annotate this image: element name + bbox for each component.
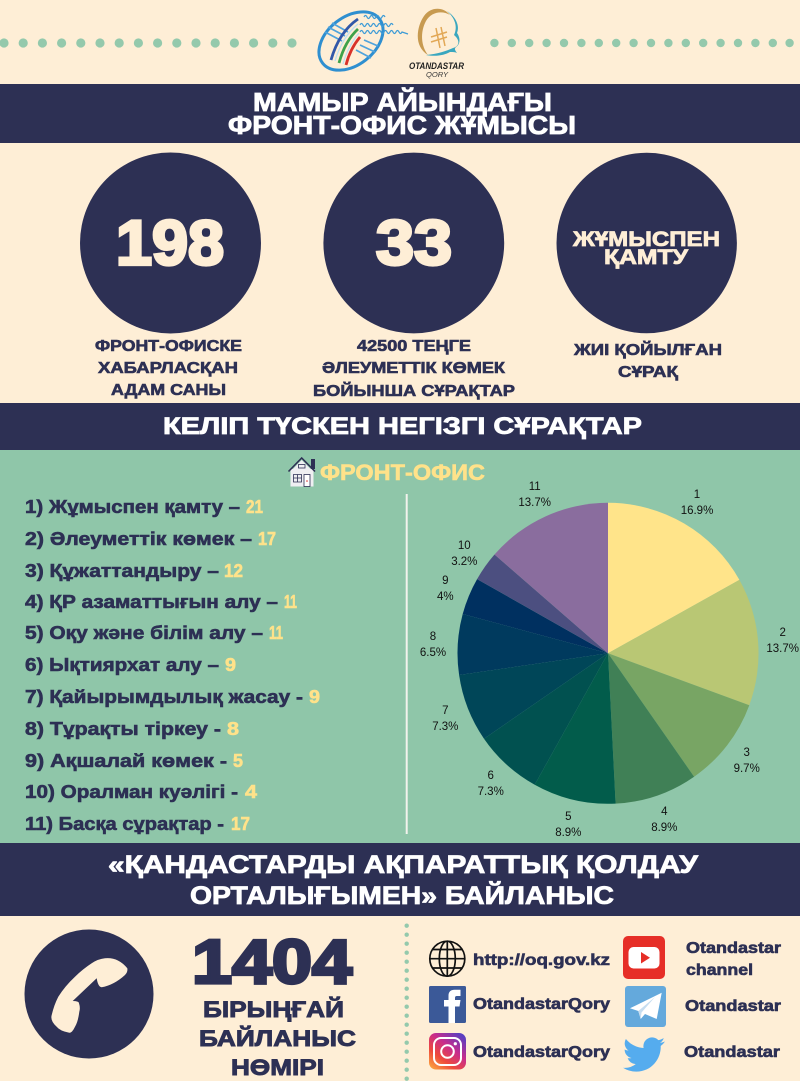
hotline number [192, 928, 356, 1080]
logo wordmark: OTANDASTAR [409, 61, 465, 71]
hotline number: БІРЫҢҒАЙ [203, 997, 344, 1022]
logo: blue ellipse emblem [308, 0, 408, 82]
panel: front office questions [0, 450, 800, 843]
item 9: 9) Ақшалай көмек - [25, 750, 227, 771]
website link: http://oq.gov.kz [473, 952, 610, 969]
pie labels: 7.3% [478, 786, 504, 798]
item 3: 3) Құжаттандыру – [25, 560, 219, 581]
item 10: 10) Оралман куәлігі - [25, 781, 238, 802]
youtube channel name: Otandastar [686, 940, 781, 957]
item 11: 17 [231, 813, 250, 834]
stat: 198: ФРОНТ-ОФИСКЕ [95, 338, 242, 355]
pie labels [420, 481, 799, 839]
item 8: 8) Тұрақты тіркеу - [25, 718, 221, 739]
stat: 198 [80, 152, 261, 399]
item 6: 6) Ықтиярхат алу – [25, 654, 219, 675]
icon: house [288, 458, 315, 486]
item 6: 9 [225, 654, 236, 675]
logo wordmark [409, 61, 465, 79]
stat: 198: АДАМ САНЫ [111, 382, 226, 399]
facebook handle: OtandastarQory [473, 996, 610, 1013]
pie labels: 4% [437, 591, 454, 603]
stat: 33: ӘЛЕУМЕТТІК КӨМЕК [322, 360, 506, 377]
item 3: 12 [224, 560, 243, 581]
title band [0, 84, 800, 143]
pie labels: 9.7% [734, 763, 760, 775]
stat: most asked question: ЖҰМЫСПЕН [572, 228, 720, 251]
dotted row: right [490, 39, 794, 47]
section band: main questions [0, 403, 800, 450]
telegram name: Otandastar [685, 998, 781, 1015]
title band: ФРОНТ-ОФИС ЖҰМЫСЫ [228, 112, 576, 140]
item 7: 9 [309, 686, 320, 707]
stat: 33: 33 [376, 208, 452, 278]
icon: facebook [429, 986, 466, 1023]
dotted row: left [0, 38, 297, 48]
pie labels: 3 [743, 747, 750, 759]
pie labels: 6.5% [420, 647, 446, 659]
hotline number: 1404 [192, 928, 353, 997]
pie labels: 1 [694, 489, 700, 501]
pie labels: 5 [565, 811, 572, 823]
item 7: 7) Қайырымдылық жасау - [25, 686, 303, 707]
pie labels: 7 [442, 705, 449, 717]
icon: globe [430, 941, 465, 976]
instagram handle: OtandastarQory [473, 1044, 610, 1061]
item 2: 2) Әлеуметтік көмек – [25, 528, 252, 549]
pie labels: 4 [661, 806, 668, 818]
logo: Otandastar Qory [409, 9, 465, 79]
stat: 33: БОЙЫНША СҰРАҚТАР [313, 382, 515, 400]
panel heading: ФРОНТ-ОФИС [320, 460, 485, 485]
hotline number: БАЙЛАНЫС [199, 1026, 356, 1051]
item 5: 11 [269, 622, 283, 643]
stat: 198: 198 [116, 208, 224, 278]
pie labels: 13.7% [766, 643, 799, 655]
section band: main questions: КЕЛІП ТҮСКЕН НЕГІЗГІ СҰРАҚТАР [163, 413, 642, 440]
pie labels: 7.3% [432, 721, 458, 733]
pie labels: 9 [442, 575, 449, 587]
logo wordmark: QORY [426, 70, 449, 79]
youtube channel name: channel [686, 962, 753, 979]
pie labels: 8 [430, 631, 436, 643]
stat: 33: 42500 ТЕҢГЕ [357, 338, 471, 355]
item 1: 21 [246, 496, 263, 517]
pie labels: 13.7% [518, 497, 551, 509]
youtube channel name [686, 940, 781, 979]
pie labels: 8.9% [651, 822, 677, 834]
stat: most asked question: СҰРАҚ [618, 364, 679, 381]
item 9: 5 [233, 750, 243, 771]
icon: telegram [625, 986, 666, 1027]
stat: 198: ХАБАРЛАСҚАН [98, 360, 238, 377]
twitter name: Otandastar [684, 1044, 780, 1061]
stat: most asked question: ЖИІ ҚОЙЫЛҒАН [573, 341, 722, 359]
pie labels: 6 [487, 770, 494, 782]
section band: contact centre [0, 843, 800, 916]
pie chart [420, 481, 799, 839]
section band: contact centre: «ҚАНДАСТАРДЫ АҚПАРАТТЫҚ ҚОЛДАУ [108, 851, 699, 879]
item 5: 5) Оқу және білім алу – [25, 622, 263, 643]
pie labels: 16.9% [681, 505, 713, 517]
item 2: 17 [258, 528, 276, 549]
section band: contact centre: ОРТАЛЫҒЫМЕН» БАЙЛАНЫС [190, 880, 614, 910]
icon: phone [24, 930, 154, 1058]
item 11: 11) Басқа сұрақтар - [25, 813, 224, 834]
pie labels: 3.2% [451, 556, 477, 568]
stat: 33 [313, 153, 515, 400]
stat: most asked question: ҚАМТУ [604, 246, 689, 269]
pie labels: 2 [779, 627, 786, 639]
item 10: 4 [245, 781, 258, 802]
item 4: 11 [284, 591, 297, 612]
item 4: 4) ҚР азаматтығын алу – [25, 591, 278, 612]
stat: most asked question [556, 153, 737, 381]
list of questions [25, 496, 320, 834]
icon: youtube [623, 936, 665, 979]
hotline number: НӨМІРІ [231, 1055, 324, 1080]
item 8: 8 [227, 718, 239, 739]
title band: МАМЫР АЙЫНДАҒЫ [253, 87, 552, 117]
icon: instagram [429, 1033, 466, 1070]
pie labels: 11 [529, 481, 541, 493]
pie labels: 8.9% [555, 827, 581, 839]
item 1: 1) Жұмыспен қамту – [25, 496, 240, 517]
dotted divider [404, 924, 409, 1081]
icon: twitter [623, 1037, 665, 1072]
pie labels: 10 [458, 540, 471, 552]
